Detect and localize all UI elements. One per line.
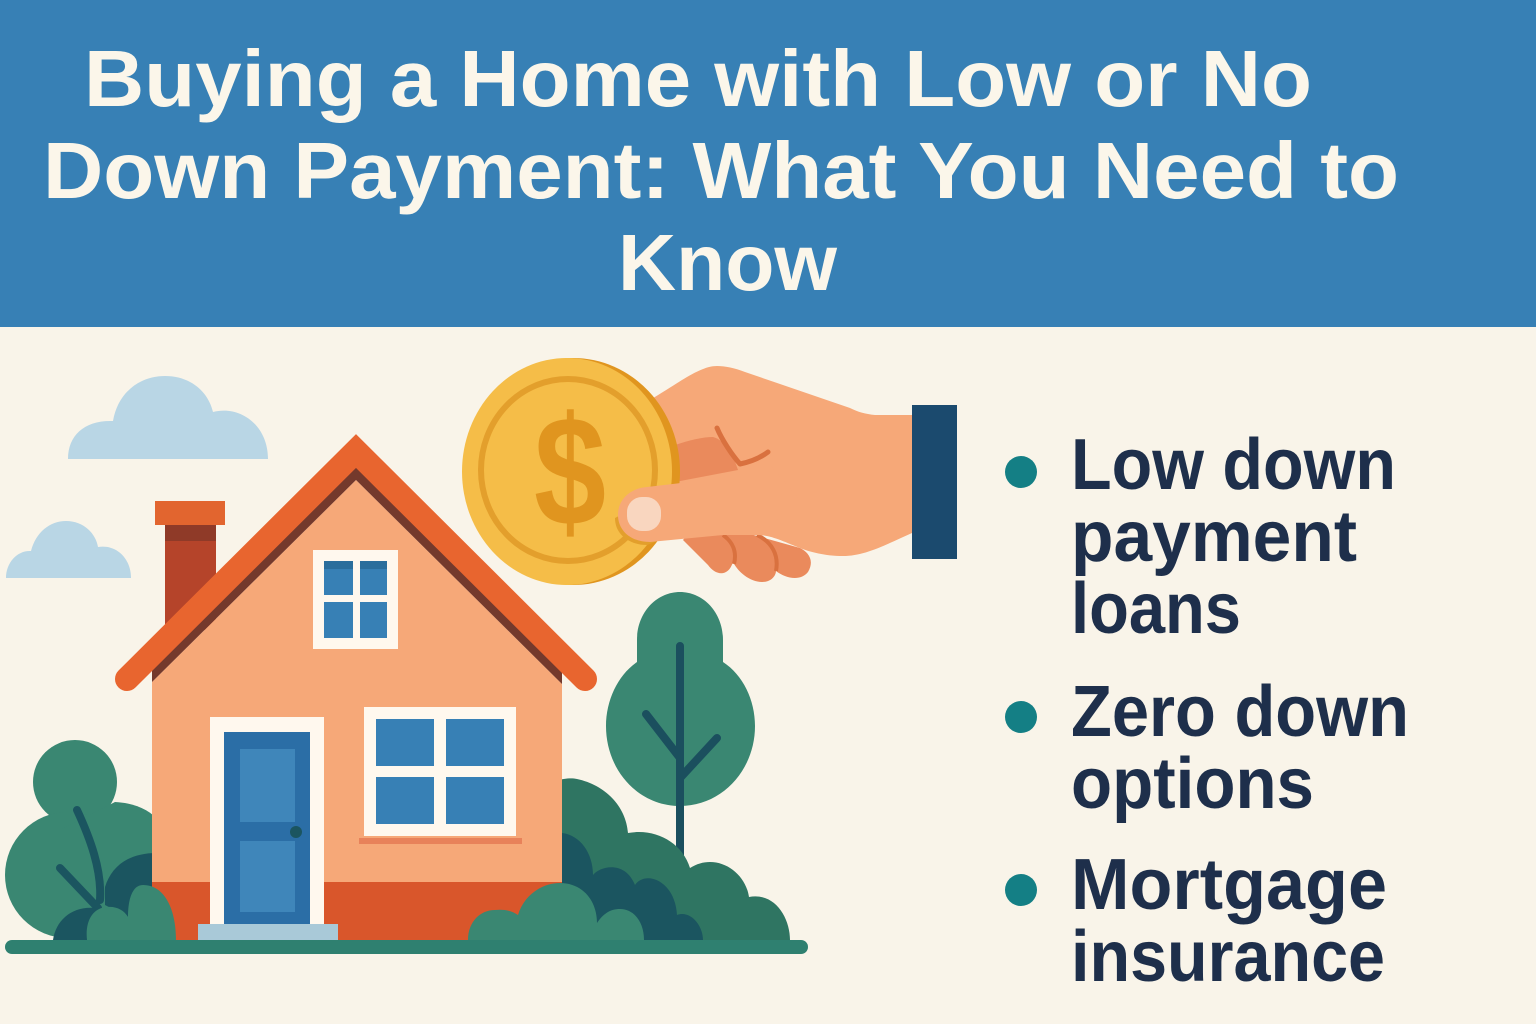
palm shadow bbox=[675, 437, 738, 482]
door bbox=[210, 717, 324, 924]
thumb bbox=[618, 465, 800, 542]
house wall bbox=[152, 480, 562, 940]
title banner bbox=[0, 0, 1536, 327]
bullet: low down payment loans: Low down bbox=[1071, 425, 1396, 505]
icon: chimney bbox=[155, 501, 225, 630]
icon: house bbox=[127, 451, 585, 941]
bullet: mortgage insurance: Mortgage bbox=[1071, 845, 1387, 925]
front window bbox=[359, 707, 522, 844]
title: Buying a Home with Low or No bbox=[84, 34, 1312, 123]
icon: hand holding coin bbox=[462, 358, 957, 585]
coin bbox=[462, 358, 680, 585]
bullet: zero down options bbox=[1005, 672, 1409, 824]
icon: right tree bbox=[606, 592, 755, 870]
door step bbox=[198, 924, 338, 941]
palm crease bbox=[717, 428, 768, 464]
icon: bushes behind house right bbox=[555, 778, 790, 940]
bullet: low down payment loans: loans bbox=[1071, 569, 1241, 649]
bullet: zero down options: options bbox=[1071, 744, 1314, 824]
icon: small cloud bbox=[6, 521, 131, 578]
bullet: low down payment loans bbox=[1005, 425, 1396, 649]
bullet: low down payment loans: payment bbox=[1071, 497, 1357, 577]
coin: $ bbox=[534, 385, 606, 559]
hand bbox=[650, 366, 912, 556]
roof shadow bbox=[152, 467, 562, 684]
icon: front bush right bbox=[468, 883, 644, 940]
icon: large cloud bbox=[68, 376, 268, 459]
sleeve cuff bbox=[912, 405, 957, 559]
coin shadow under thumb bbox=[615, 505, 660, 545]
bullet: mortgage insurance: insurance bbox=[1071, 917, 1385, 997]
roof bbox=[127, 451, 585, 679]
bullet: zero down options: Zero down bbox=[1071, 672, 1409, 752]
lower fingers bbox=[683, 520, 811, 582]
title: Know bbox=[618, 218, 838, 307]
house base bbox=[152, 882, 562, 940]
title: Down Payment: What You Need to bbox=[43, 126, 1399, 215]
title bbox=[43, 34, 1399, 307]
attic window bbox=[313, 550, 398, 649]
thumbnail bbox=[627, 497, 661, 531]
bullet: mortgage insurance bbox=[1005, 845, 1387, 997]
bullet list bbox=[1005, 425, 1409, 997]
icon: front bush left bbox=[87, 885, 176, 940]
ground bbox=[5, 940, 808, 954]
icon: left bushes bbox=[5, 740, 160, 940]
